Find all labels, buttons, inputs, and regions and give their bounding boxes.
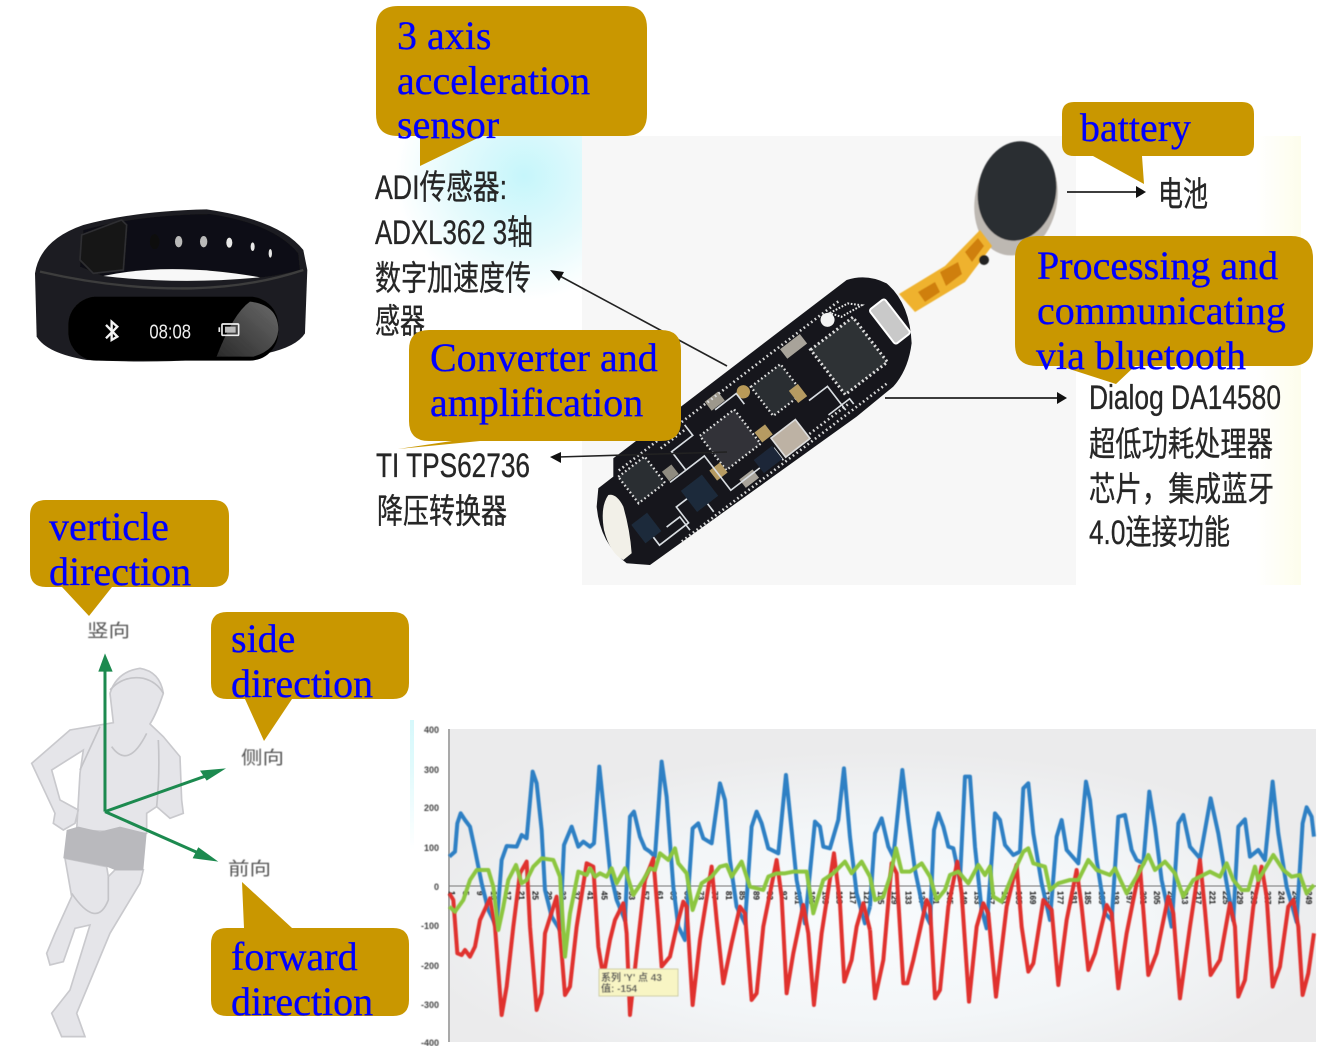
x axis tick labels: 113 <box>834 891 844 904</box>
x axis tick labels: 9 <box>475 891 484 896</box>
x axis tick labels: 185 <box>1083 891 1092 905</box>
callout: battery: battery <box>1080 105 1191 150</box>
x axis tick labels: 225 <box>1221 891 1230 905</box>
text: TI converter label <box>376 447 530 531</box>
callout: side direction: side <box>231 616 295 661</box>
x axis tick labels: 25 <box>530 891 540 900</box>
callout: forward direction <box>211 882 409 1024</box>
arrow: battery pointer <box>1067 186 1146 198</box>
arrow: converter pointer <box>550 452 727 463</box>
chart tooltip: 系列 'Y' 点 43 <box>601 971 662 984</box>
runner body lines <box>72 678 163 913</box>
y axis labels: -200 <box>421 961 439 971</box>
text: Dialog processor label: 超低功耗处理器 <box>1089 426 1273 464</box>
x axis tick labels: 89 <box>752 891 760 900</box>
chart tooltip: 值: -154 <box>601 982 638 995</box>
callout: processing and communicating <box>1015 236 1313 384</box>
x axis tick labels: 5 <box>461 891 470 896</box>
red series <box>449 853 1314 1015</box>
x axis tick labels: 169 <box>1028 891 1037 905</box>
callout: 3 axis acceleration sensor: acceleration <box>397 58 590 103</box>
arrow: processor pointer <box>885 392 1067 404</box>
x axis tick labels: 37 <box>572 891 581 900</box>
x axis tick labels: 217 <box>1194 891 1202 905</box>
x axis tick labels: 129 <box>890 891 898 905</box>
x axis tick labels: 53 <box>627 891 636 900</box>
axis arrows <box>98 653 226 862</box>
x axis tick labels: 81 <box>724 891 733 900</box>
green series <box>449 848 1314 957</box>
callout: 3 axis acceleration sensor: sensor <box>397 102 499 147</box>
x axis tick labels: 61 <box>655 891 664 900</box>
x axis tick labels: 133 <box>904 891 912 905</box>
callout: processing and communicating: via bluetooth <box>1036 333 1246 378</box>
text: Dialog processor label: 4.0连接功能 <box>1089 514 1230 552</box>
x axis tick labels: 13 <box>489 891 498 900</box>
x axis tick labels: 21 <box>516 891 526 900</box>
x axis tick labels: 49 <box>613 891 622 900</box>
y axis labels: 0 <box>434 882 439 892</box>
x axis tick labels: 109 <box>820 891 830 905</box>
x axis tick labels: 213 <box>1180 891 1189 905</box>
x axis tick labels: 73 <box>696 891 705 900</box>
x axis tick labels: 209 <box>1166 891 1175 905</box>
x axis tick labels: 57 <box>641 891 650 900</box>
y axis labels: 300 <box>424 765 439 775</box>
x axis tick labels: 69 <box>682 891 692 900</box>
screen time readout: 08:08 <box>149 320 191 343</box>
y axis labels: 400 <box>424 725 439 735</box>
x axis tick labels: 117 <box>848 891 857 904</box>
x axis tick labels: 173 <box>1042 891 1050 905</box>
callout: battery <box>1062 102 1254 184</box>
photo: vibration motor battery disc <box>964 135 1068 263</box>
x axis tick labels: 17 <box>503 891 512 900</box>
x axis tick labels: 245 <box>1290 891 1300 905</box>
callout: processing and communicating: communicating <box>1037 288 1286 333</box>
text: TI converter label: TI TPS62736 <box>376 447 530 485</box>
chart tooltip <box>599 969 678 996</box>
icon: battery glyph <box>219 324 239 335</box>
x axis tick labels: 233 <box>1249 891 1258 905</box>
x axis tick labels: 205 <box>1152 891 1161 905</box>
x axis tick labels: 141 <box>931 891 940 905</box>
x axis tick labels: 1 <box>447 891 456 896</box>
chart: three axis acceleration line chart <box>410 720 1316 1046</box>
x axis tick labels: 45 <box>600 891 608 900</box>
text: ADI sensor label: ADI传感器: <box>375 169 507 207</box>
x axis tick labels: 165 <box>1014 891 1023 905</box>
y axis labels: 200 <box>424 803 439 813</box>
callout: converter and amplification: Converter and <box>430 335 658 380</box>
x axis tick labels: 145 <box>945 891 954 905</box>
panel: circuit board photo backdrop <box>375 136 1301 585</box>
x axis tick labels: 125 <box>876 891 885 905</box>
icon: bluetooth glyph <box>106 322 117 340</box>
x axis tick labels: 177 <box>1056 891 1064 905</box>
callout: verticle direction: verticle <box>49 504 169 549</box>
x axis tick labels: 153 <box>972 891 982 905</box>
x axis tick labels: 189 <box>1097 891 1106 905</box>
photo: flexible orange ribbon <box>899 230 992 312</box>
callout: forward direction: forward <box>231 934 358 979</box>
x axis tick labels: 93 <box>765 891 774 900</box>
x axis tick labels: 29 <box>544 891 553 900</box>
callout: forward direction: direction <box>231 979 373 1024</box>
x axis tick labels: 33 <box>558 891 567 900</box>
text: battery Chinese label: 电池 <box>1158 176 1208 214</box>
x axis tick labels: 77 <box>710 891 719 900</box>
arrow: sensor pointer <box>550 270 727 366</box>
text: ADI sensor label: 数字加速度传 <box>375 260 531 298</box>
x axis tick labels: 97 <box>779 891 788 900</box>
x axis tick labels: 121 <box>862 891 871 905</box>
x axis tick labels: 193 <box>1111 891 1120 905</box>
runner shorts <box>63 827 147 870</box>
text: Dialog processor label <box>1089 379 1281 552</box>
callout: processing and communicating: Processing and <box>1037 243 1278 288</box>
x axis tick labels: 201 <box>1138 891 1148 905</box>
runner silhouette <box>32 668 183 1037</box>
x axis tick labels: 137 <box>917 891 926 905</box>
x axis tick labels: 237 <box>1263 891 1272 905</box>
x axis tick labels: 229 <box>1235 891 1244 905</box>
label: forward direction Chinese: 前向 <box>228 859 271 879</box>
callout: verticle direction <box>30 500 229 616</box>
y axis labels: 100 <box>424 843 439 853</box>
y axis labels: -300 <box>421 1000 439 1010</box>
y axis labels <box>421 725 439 1046</box>
photo: circuit board <box>597 277 926 565</box>
x axis tick labels: 65 <box>668 891 678 900</box>
x axis tick labels: 85 <box>738 891 746 900</box>
x axis tick labels: 221 <box>1208 891 1216 905</box>
callout: 3 axis acceleration sensor <box>376 6 647 166</box>
x axis tick labels: 161 <box>1000 891 1009 905</box>
callout: side direction: direction <box>231 661 373 706</box>
panel: runner with axis arrows <box>32 653 226 1037</box>
blue series <box>449 762 1314 940</box>
callout: 3 axis acceleration sensor: 3 axis <box>397 13 491 58</box>
x axis tick labels <box>447 891 1313 905</box>
x axis tick labels: 149 <box>959 891 968 905</box>
y axis labels: -100 <box>421 921 439 931</box>
x axis tick labels: 41 <box>586 891 594 900</box>
label: vertical direction Chinese: 竖向 <box>87 621 130 641</box>
text: ADI sensor label: 感器 <box>375 303 425 341</box>
x axis tick labels: 197 <box>1124 891 1134 905</box>
x axis tick labels: 157 <box>986 891 996 905</box>
text: TI converter label: 降压转换器 <box>377 493 507 531</box>
x axis tick labels: 181 <box>1069 891 1078 905</box>
x axis tick labels: 105 <box>807 891 816 905</box>
callout: converter and amplification: amplification <box>430 380 643 425</box>
x axis tick labels: 101 <box>793 891 802 905</box>
text: ADI sensor label <box>375 169 533 341</box>
photo: smart wristband <box>35 209 307 361</box>
callout: verticle direction: direction <box>49 549 191 594</box>
x axis tick labels: 249 <box>1304 891 1313 905</box>
callout: side direction <box>211 612 409 741</box>
label: side direction Chinese: 侧向 <box>241 748 284 768</box>
text: Dialog processor label: 芯片，集成蓝牙 <box>1089 471 1274 509</box>
callout: converter and amplification <box>398 330 681 449</box>
text: ADI sensor label: ADXL362 3轴 <box>375 214 533 252</box>
x axis tick labels: 241 <box>1276 891 1286 905</box>
